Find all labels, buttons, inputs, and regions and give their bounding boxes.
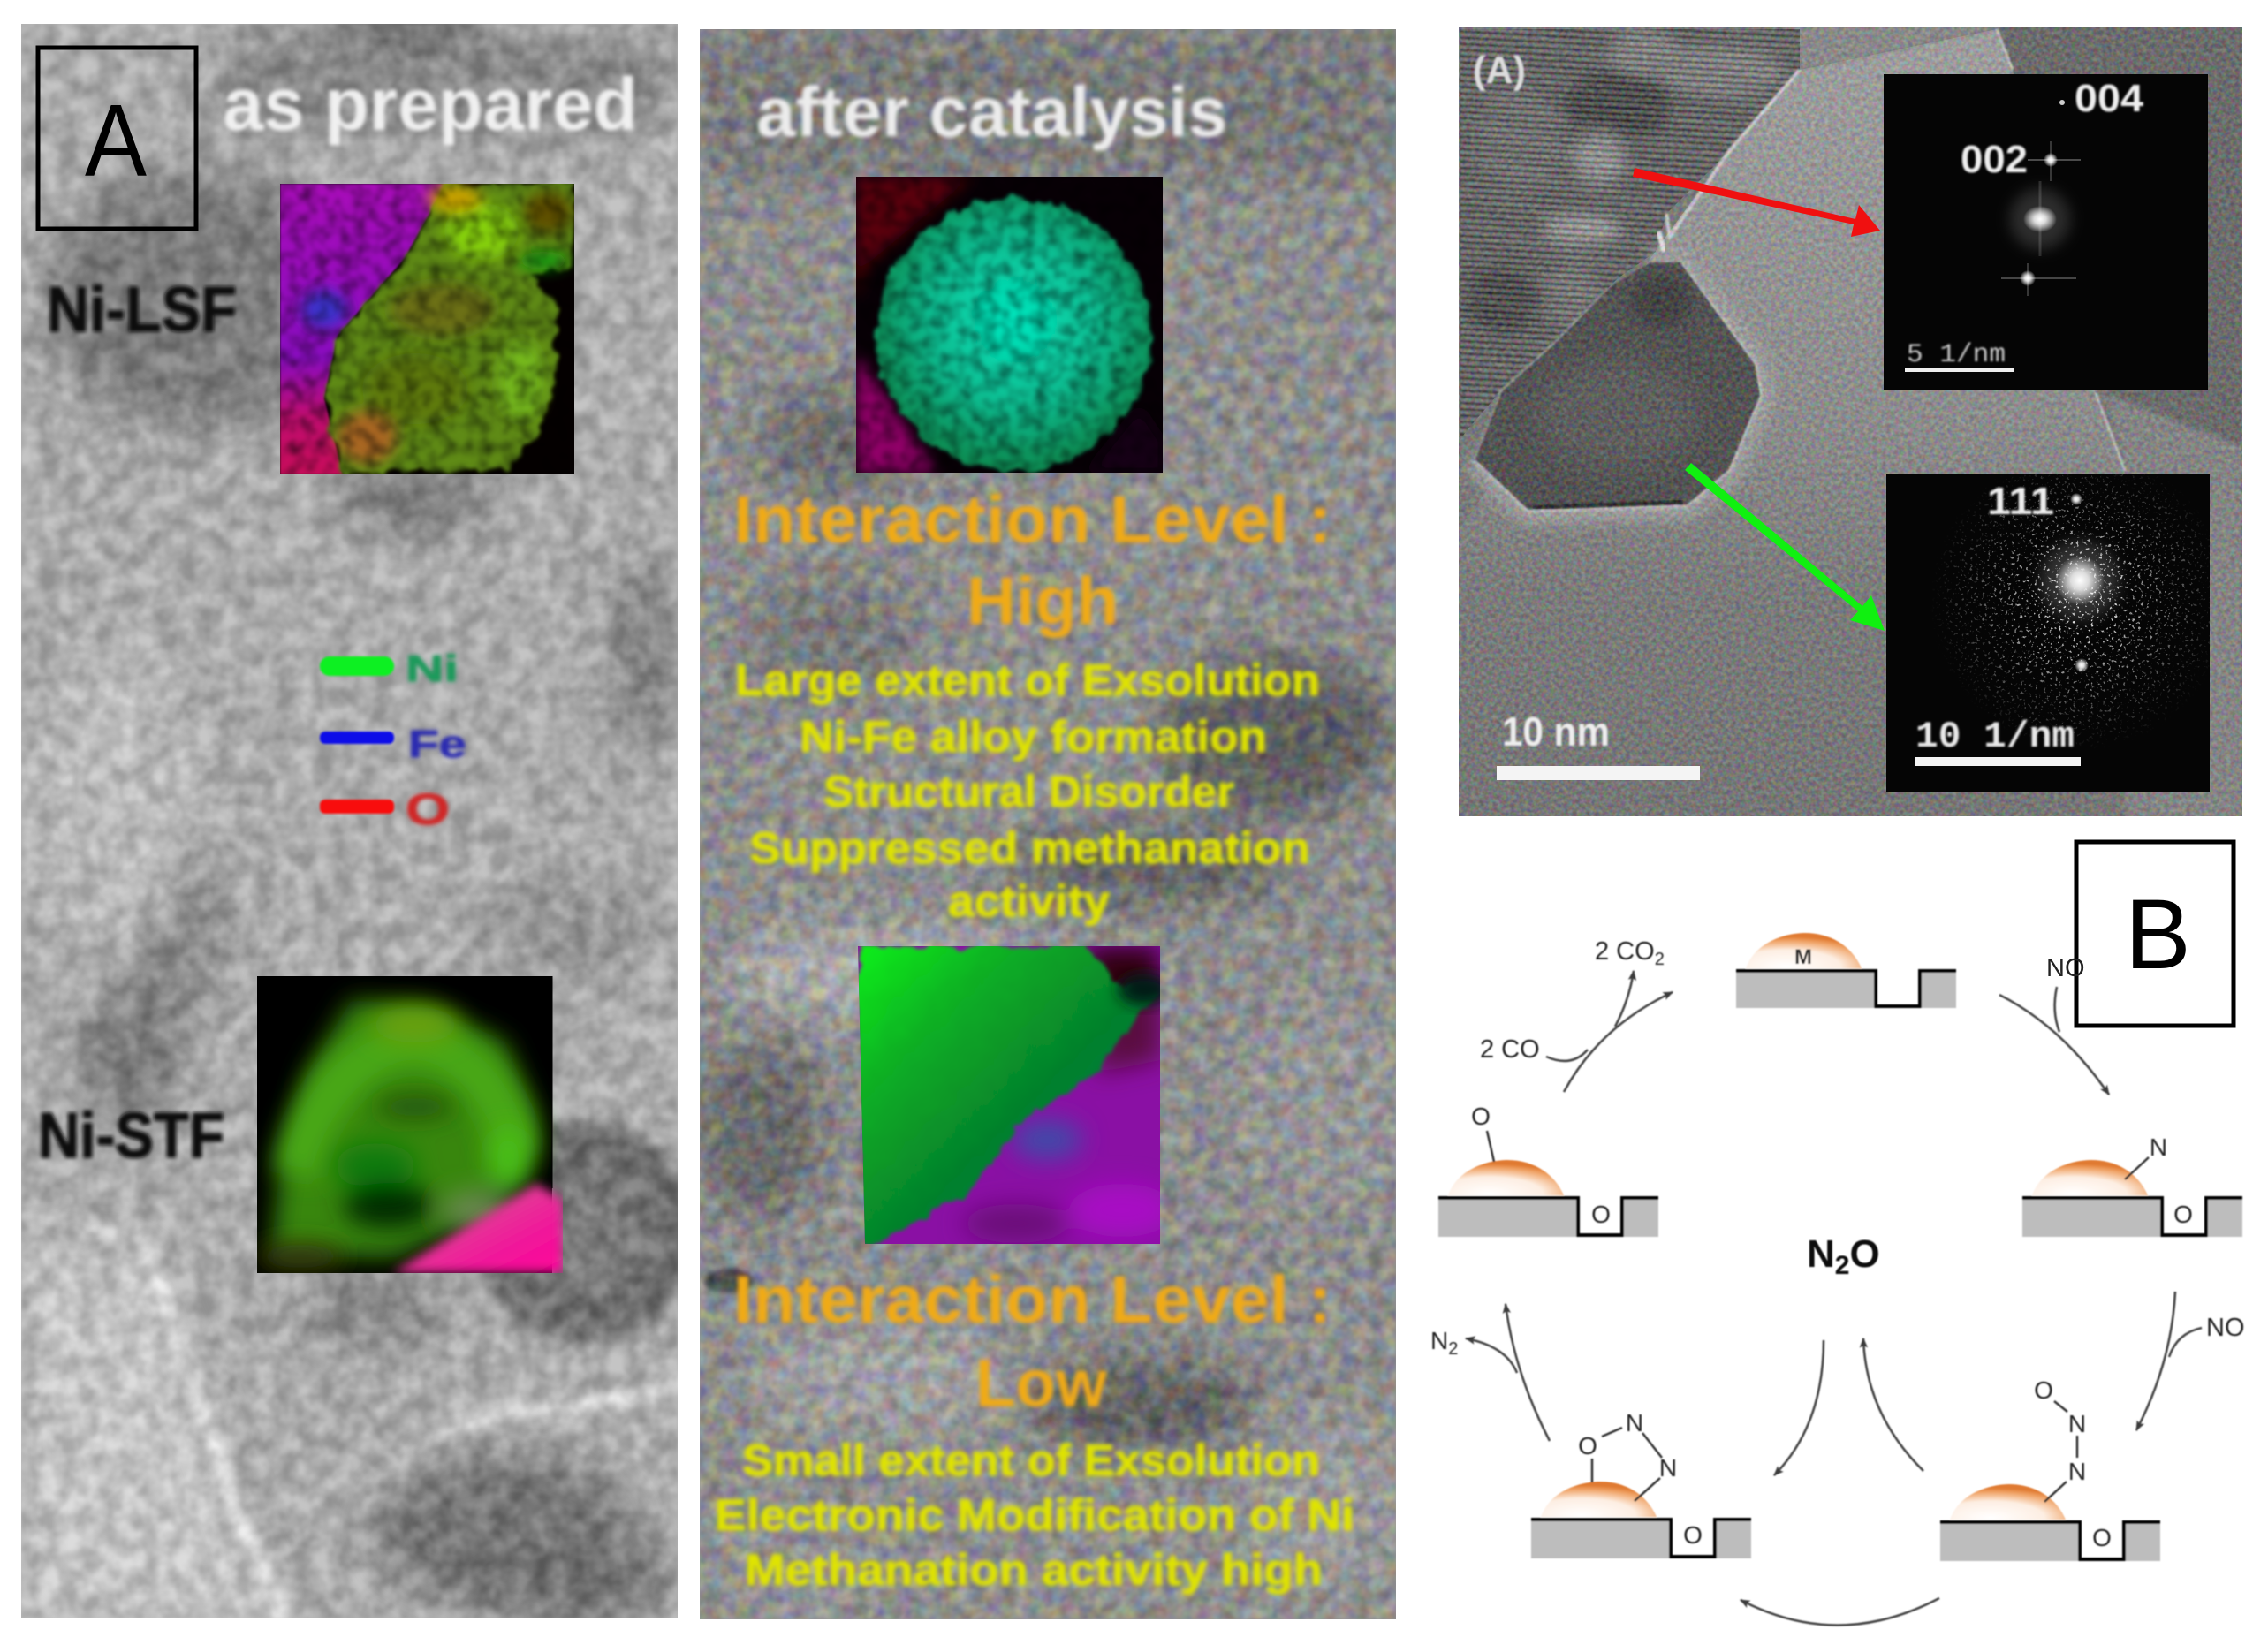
heading: as prepared: as prepared xyxy=(223,63,638,146)
cycle step: O-N-N ring: O xyxy=(1683,1521,1703,1549)
label 004: 004 xyxy=(2075,77,2144,120)
cycle step: O-N-N chain: O xyxy=(2092,1524,2112,1551)
label box B: B xyxy=(2125,879,2191,989)
panel: HRTEM image with FFT insets xyxy=(1459,27,2242,816)
label: N2O: N xyxy=(1807,1232,1835,1276)
arrow branches xyxy=(1546,987,2202,1357)
label (A): (A) xyxy=(1473,49,1526,92)
scale bar xyxy=(1915,757,2081,766)
arrow: red xyxy=(1633,168,1880,237)
scale label: 10 1/nm xyxy=(1915,716,2075,758)
panel: N2O catalytic cycle xyxy=(1430,933,2244,1626)
panel: as prepared TEM image xyxy=(21,0,696,1621)
arrow: green xyxy=(1685,463,1885,631)
label: Ni-LSF: Ni-LSF xyxy=(47,275,237,345)
cycle step: O-N-N ring: N xyxy=(1626,1409,1643,1437)
label box A xyxy=(38,48,196,229)
inset: FFT pattern top xyxy=(1884,74,2208,390)
label: 2 CO2: 2 CO xyxy=(1595,937,1655,966)
cycle step: O-N-N ring: O xyxy=(1578,1432,1597,1459)
label 111: 111 xyxy=(1987,480,2054,523)
text block: low interaction xyxy=(715,1262,1354,1595)
label: N2: N xyxy=(1430,1327,1448,1354)
value: Low: Low xyxy=(975,1346,1108,1421)
upper right carbon xyxy=(1997,27,2242,451)
line: Small extent of Exsolution xyxy=(742,1436,1320,1485)
legend: Fe xyxy=(320,723,466,766)
cycle step: O on metal with vacancy O xyxy=(1438,1103,1658,1237)
cycle step: O on metal with vacancy O: O xyxy=(1591,1201,1611,1228)
legend: Ni xyxy=(320,648,459,689)
particle xyxy=(1474,262,1762,512)
particle halo xyxy=(1474,262,1762,512)
line: Methanation activity high xyxy=(745,1545,1323,1595)
line: Electronic Modification of Ni xyxy=(715,1490,1354,1540)
FFT spots xyxy=(2001,100,2081,296)
cycle step: O-N-N ring xyxy=(1531,1409,1751,1558)
label: N2: 2 xyxy=(1448,1339,1458,1359)
cycle step: O-N-N ring: N xyxy=(1659,1454,1677,1482)
label: NO right: NO xyxy=(2206,1314,2244,1342)
elemental map: after catalysis high interaction xyxy=(856,177,1163,473)
scale bar xyxy=(1905,368,2014,372)
cycle step: bare metal M xyxy=(1736,933,1956,1008)
cycle step: N on metal: N xyxy=(2150,1133,2167,1161)
cycle step: N on metal xyxy=(2022,1133,2242,1237)
legend: Fe: Fe xyxy=(408,723,466,766)
FFT spots xyxy=(2041,493,2119,672)
heading: interaction level: Interaction Level : xyxy=(733,482,1331,557)
heading: after catalysis: after catalysis xyxy=(756,72,1227,151)
line: activity xyxy=(948,876,1110,926)
scale: 10 nm xyxy=(1497,709,1700,780)
cycle step: O-N-N chain xyxy=(1940,1376,2160,1561)
label: N2O: 2 xyxy=(1835,1251,1849,1280)
legend: O xyxy=(320,785,450,834)
arrows: catalytic cycle xyxy=(1466,971,2175,1626)
line: Suppressed methanation xyxy=(749,823,1310,873)
cycle step: O-N-N chain: O xyxy=(2034,1376,2053,1404)
label box B xyxy=(2076,842,2234,1026)
label: 2 CO2: 2 xyxy=(1655,950,1665,969)
elemental map: Ni-STF xyxy=(256,976,563,1273)
value: High: High xyxy=(967,564,1119,639)
cycle step: O-N-N chain: N xyxy=(2068,1410,2086,1437)
scale: 10 nm: 10 nm xyxy=(1502,709,1610,754)
inset: FFT pattern bottom xyxy=(1886,474,2210,792)
legend: O: O xyxy=(406,785,450,834)
legend: Ni: Ni xyxy=(406,648,459,689)
heading: interaction level: Interaction Level : xyxy=(733,1262,1331,1338)
vacuum region xyxy=(1459,29,2124,534)
label: Ni-STF: Ni-STF xyxy=(38,1101,224,1171)
label: 2 CO: 2 CO xyxy=(1480,1035,1540,1064)
cycle step: O on metal with vacancy O: O xyxy=(1471,1103,1491,1130)
label: NO top: NO xyxy=(2046,954,2085,982)
line: Large extent of Exsolution xyxy=(735,656,1320,705)
scale label: 5 1/nm xyxy=(1907,340,2006,370)
text block: high interaction xyxy=(733,482,1331,926)
label box A: A xyxy=(85,83,148,198)
label: N2O: O xyxy=(1849,1232,1880,1276)
cycle step: N on metal: O xyxy=(2173,1201,2193,1228)
label 002: 002 xyxy=(1961,138,2028,181)
particle rim xyxy=(1474,262,1762,512)
elemental map: after catalysis low interaction xyxy=(858,946,1175,1244)
elemental map: Ni-LSF xyxy=(280,184,574,474)
legend: elements xyxy=(320,648,466,834)
cycle step: bare metal M: M xyxy=(1794,945,1812,969)
panel: after catalysis TEM image xyxy=(698,29,1414,1626)
line: Ni-Fe alloy formation xyxy=(800,712,1267,762)
line: Structural Disorder xyxy=(823,767,1234,816)
cycle step: O-N-N chain: N xyxy=(2068,1458,2086,1485)
crystal xyxy=(1460,29,1814,444)
